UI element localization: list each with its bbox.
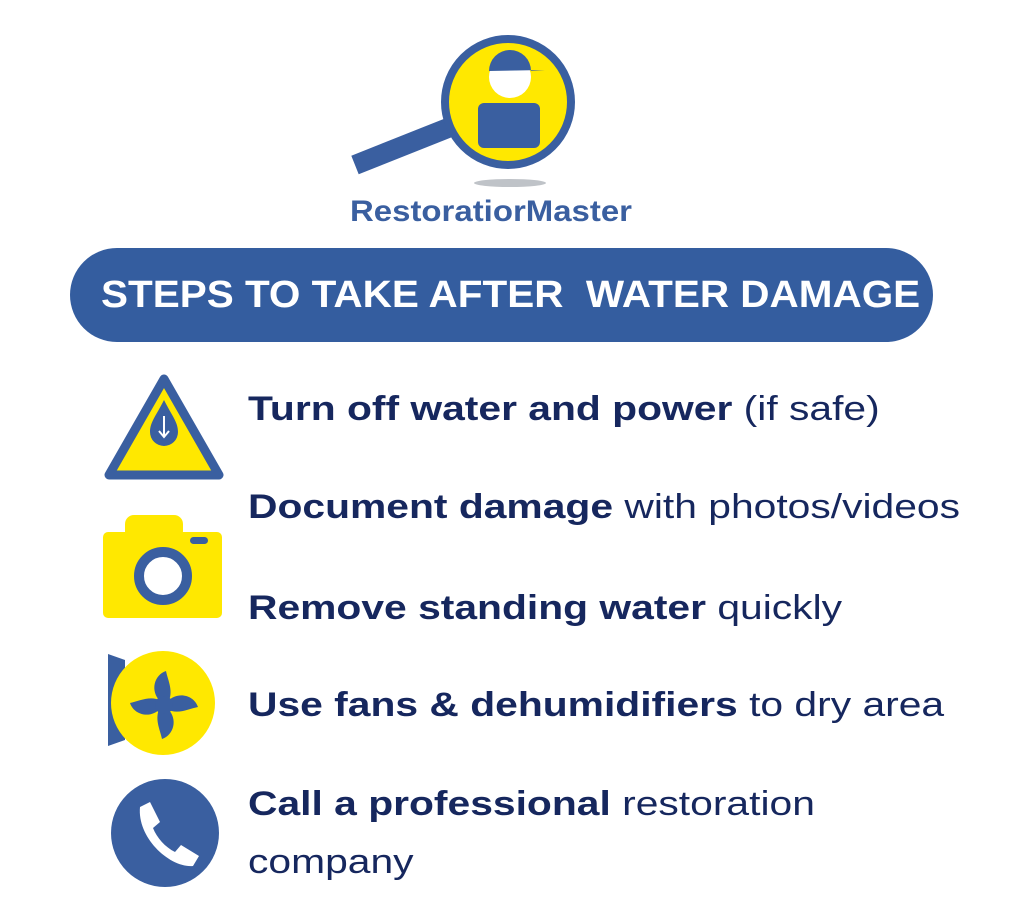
step 4 text: Use fans & dehumidifiers to dry area xyxy=(248,686,944,724)
shadow xyxy=(474,179,546,187)
icon: phone xyxy=(111,779,219,887)
icon: magnifier lens xyxy=(445,39,571,165)
step 5 text xyxy=(248,785,815,881)
logo xyxy=(350,35,632,228)
step 2 text: Document damage with photos/videos xyxy=(248,488,960,526)
step 5 text: Call a professional restoration xyxy=(248,785,815,823)
icon: warning triangle xyxy=(109,379,219,475)
title banner xyxy=(70,248,933,342)
step 5 text: company xyxy=(248,843,414,881)
icon: fan xyxy=(108,651,215,755)
step 1 text: Turn off water and power (if safe) xyxy=(248,390,880,428)
icon: camera xyxy=(103,515,222,618)
step 3 text: Remove standing water quickly xyxy=(248,589,842,627)
icons xyxy=(103,374,224,887)
title banner: STEPS TO TAKE AFTER WATER DAMAGE xyxy=(101,274,920,316)
brand name: RestoratiorMaster xyxy=(350,195,632,228)
icon: magnifier handle xyxy=(355,128,448,165)
